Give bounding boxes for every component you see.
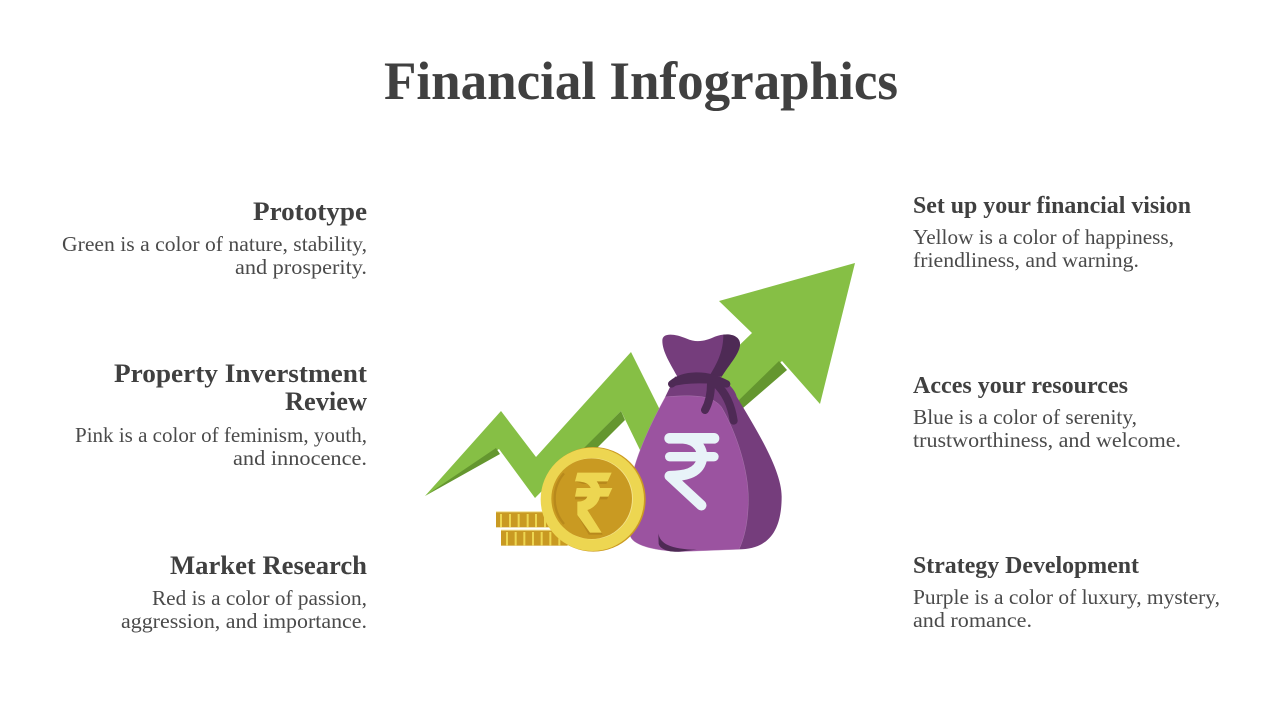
text: strategy description: and romance. [913,608,1032,632]
text: property description [75,423,367,470]
panel: property investment review [75,359,367,470]
text: resources description [913,405,1181,452]
illustration: finance growth [425,263,855,552]
text: market research description: Red is a color of passion, [152,586,367,610]
icon: money bag [627,334,782,552]
text: prototype description [62,232,367,279]
text: financial vision description: friendliness, and warning. [913,248,1139,272]
panel: prototype [62,197,367,279]
text: prototype description: Green is a color of nature, stability, [62,232,367,256]
heading: resources: Acces your resources [913,373,1128,399]
heading: market research: Market Research [170,551,368,580]
heading: prototype: Prototype [253,197,367,226]
heading: financial vision: Set up your financial vision [913,193,1191,219]
title: Financial Infographics [384,51,898,111]
panel: financial vision [913,193,1191,272]
panel: resources [913,373,1181,452]
heading: property investment review: Property Inverstment [114,359,367,388]
text: financial vision description: Yellow is a color of happiness, [913,225,1174,249]
icon: coin stacks [496,511,568,546]
text: property description: Pink is a color of feminism, youth, [75,423,367,447]
text: market research description: aggression, and importance. [121,609,367,633]
text: market research description [121,586,367,633]
text: property description: and innocence. [233,446,367,470]
text: resources description: trustworthiness, and welcome. [913,428,1181,452]
panel: strategy development [913,553,1220,632]
arrow: green growth arrow [425,263,855,498]
text: prototype description: and prosperity. [235,255,367,279]
text: strategy description: Purple is a color of luxury, mystery, [913,585,1220,609]
icon: rupee symbol on coin [575,473,612,535]
icon: gold rupee coin [541,447,646,552]
text: strategy description [913,585,1220,632]
heading: property investment review: Review [285,387,367,416]
text: resources description: Blue is a color of serenity, [913,405,1137,429]
text: financial vision description [913,225,1174,272]
heading: strategy development: Strategy Development [913,553,1139,579]
heading: property investment review [114,359,367,416]
panel: market research [121,551,368,633]
icon: rupee symbol on bag [670,438,714,505]
